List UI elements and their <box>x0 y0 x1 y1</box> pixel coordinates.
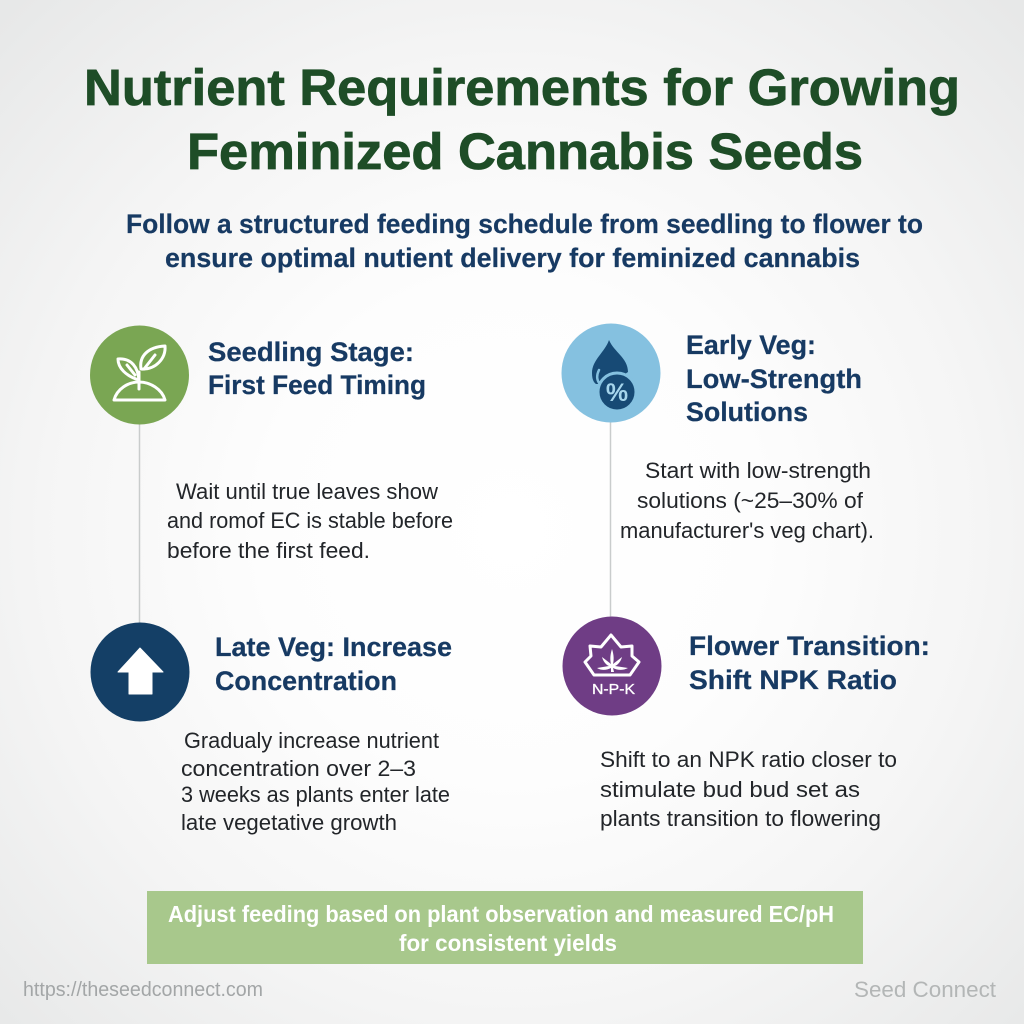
heading: Seedling Stage: <box>208 337 414 367</box>
body text <box>181 728 450 835</box>
icon: NPK leaf <box>562 616 662 716</box>
connector: seedling to late veg <box>138 424 140 626</box>
callout: for consistent yields <box>399 930 617 956</box>
body text: Wait until true leaves show <box>176 479 438 504</box>
heading: Late Veg: Increase <box>215 632 452 662</box>
body text: 3 weeks as plants enter late <box>181 782 450 807</box>
panel: flower transition <box>562 616 930 831</box>
icon: NPK leaf: N-P-K <box>592 681 635 698</box>
heading: First Feed Timing <box>208 370 426 400</box>
connector: early veg to flower transition <box>610 420 612 620</box>
footer brand: Seed Connect <box>854 977 996 1002</box>
body text <box>620 458 874 543</box>
body text: stimulate bud bud set as <box>600 777 860 802</box>
subtitle: Follow a structured feeding schedule from seedling to flower to <box>126 209 923 239</box>
body text <box>600 747 897 831</box>
heading: Early Veg: <box>686 330 816 360</box>
icon: seedling <box>90 326 189 424</box>
title: Feminized Cannabis Seeds <box>187 123 863 180</box>
panel: seedling stage <box>90 326 453 563</box>
callout: Adjust feeding based on plant observation and measured EC/pH <box>168 901 834 927</box>
heading: Shift NPK Ratio <box>689 665 897 695</box>
body text: plants transition to flowering <box>600 806 881 831</box>
heading: Low-Strength <box>686 364 862 394</box>
body text: concentration over 2–3 <box>181 756 416 781</box>
body text: Gradualy increase nutrient <box>184 728 439 753</box>
heading: Solutions <box>686 397 808 427</box>
heading: Flower Transition: <box>689 631 930 661</box>
body text: before the first feed. <box>167 538 370 563</box>
footer url: https://theseedconnect.com <box>23 979 263 1001</box>
panel: early veg <box>562 324 874 543</box>
panel: late veg <box>90 622 452 835</box>
body text: Shift to an NPK ratio closer to <box>600 747 897 772</box>
icon: water drop with percent <box>562 324 660 422</box>
subtitle: ensure optimal nutient delivery for feminized cannabis <box>165 243 860 273</box>
body text: solutions (~25–30% of <box>637 488 864 513</box>
heading: Concentration <box>215 666 397 696</box>
body text <box>167 479 453 563</box>
subtitle <box>126 209 923 273</box>
body text: late vegetative growth <box>181 810 397 835</box>
icon: up arrow <box>90 622 190 722</box>
body text: manufacturer's veg chart). <box>620 518 874 543</box>
heading <box>208 337 426 400</box>
title <box>84 59 960 180</box>
body text: and romof EC is stable before <box>167 508 453 533</box>
icon: water drop with percent: % <box>606 379 628 407</box>
heading <box>689 631 930 695</box>
callout <box>147 891 863 964</box>
heading <box>686 330 862 427</box>
body text: Start with low-strength <box>645 458 871 483</box>
title: Nutrient Requirements for Growing <box>84 59 960 116</box>
heading <box>215 632 452 696</box>
